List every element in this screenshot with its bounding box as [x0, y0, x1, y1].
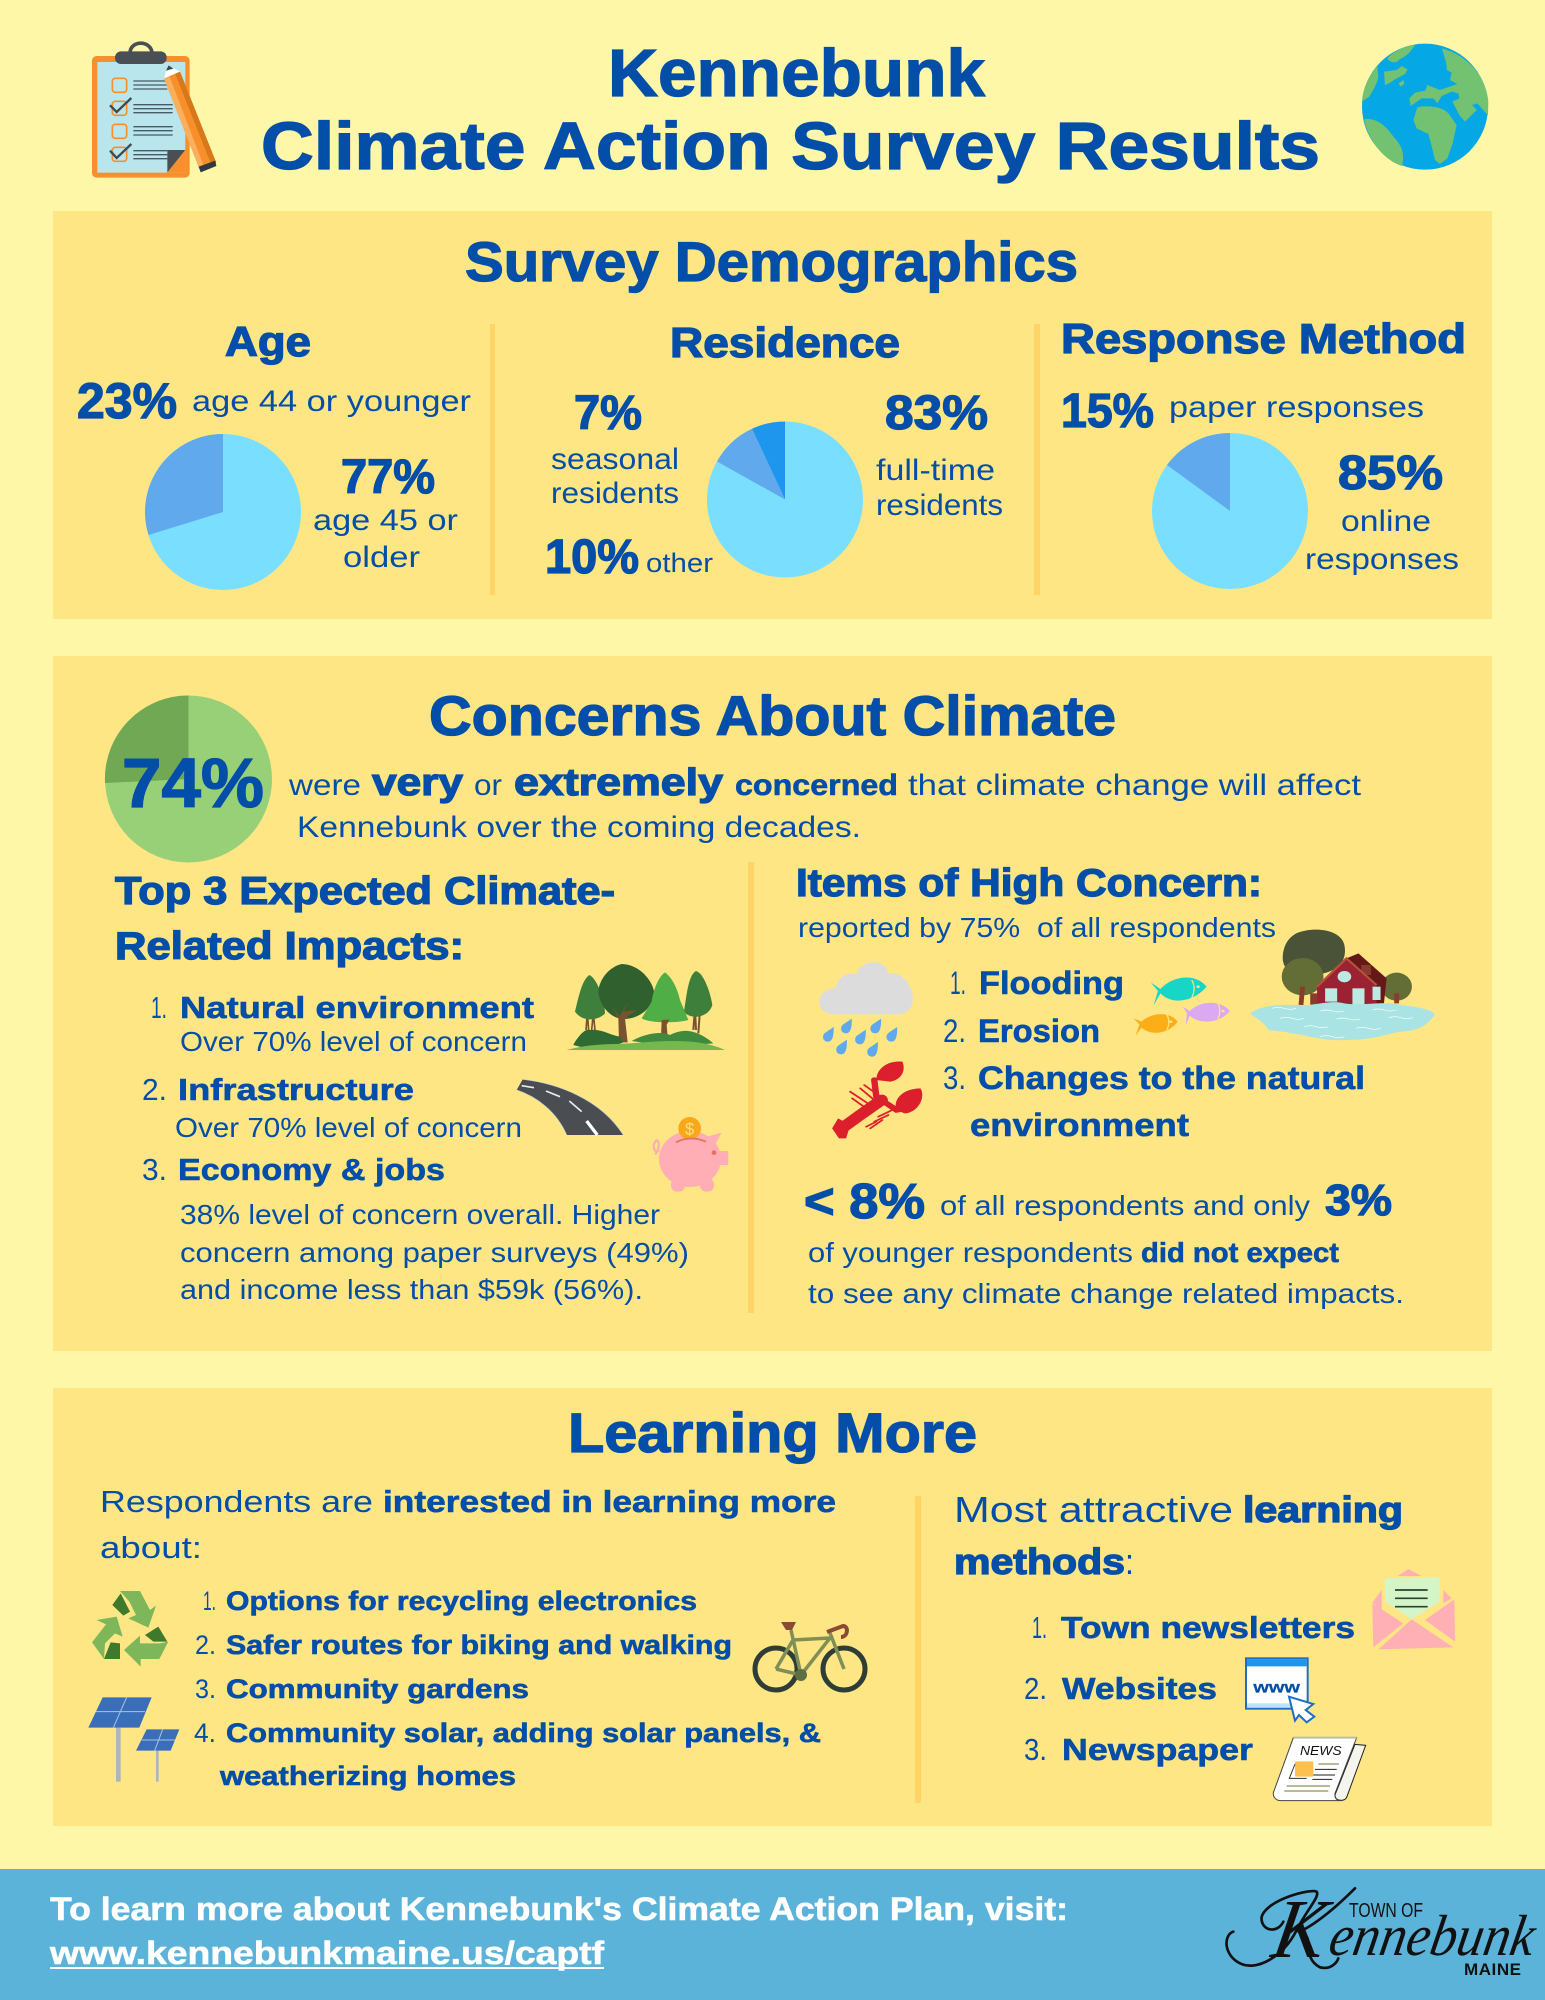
title: Climate Action Survey Results [261, 109, 1320, 184]
icon: flooded house [1250, 930, 1435, 1040]
footer banner [0, 1869, 1545, 2000]
list: topics: 3. [195, 1674, 216, 1704]
list: methods: 1. [1032, 1610, 1047, 1645]
intro text: Kennebunk over the coming decades. [297, 811, 861, 844]
stat: 83 percent full-time: full-time [876, 454, 995, 487]
item: natural environment: 1. [151, 990, 167, 1025]
stat: 77 percent older: age 45 or [313, 504, 458, 537]
stat: 7 percent seasonal: 7% [574, 387, 642, 440]
stat: 23 percent younger [77, 373, 471, 429]
panel: concerns about climate [53, 656, 1492, 1351]
list: methods [1024, 1610, 1355, 1767]
stat: 85 percent online: online [1341, 505, 1431, 538]
intro text: very [372, 762, 463, 804]
list: methods: 2. [1024, 1671, 1047, 1706]
stat: 10 percent other [545, 531, 713, 584]
list: methods: Town newsletters [1061, 1610, 1355, 1645]
logo: town of Kennebunk [1227, 1882, 1545, 1979]
subheading: reported by 75 percent: reported by 75% of all respondents [798, 912, 1276, 943]
item: infrastructure [142, 1072, 522, 1143]
stat: 85 percent online: 85% [1338, 447, 1443, 500]
age column [77, 318, 471, 590]
intro: most attractive learning methods [954, 1489, 1403, 1582]
stat: 7 percent seasonal: seasonal [551, 443, 679, 476]
learning methods [954, 1489, 1455, 1801]
intro: most attractive learning methods: Most attractive [954, 1489, 1233, 1530]
pie chart: 74 percent: 74% [122, 744, 264, 822]
callout: did not expect: to see any climate change related impacts. [808, 1278, 1404, 1309]
intro: interested in learning more: interested in learning more [383, 1484, 836, 1519]
logo: town of Kennebunk: MAINE [1464, 1960, 1521, 1979]
item: economy and jobs [142, 1152, 689, 1305]
logo: town of Kennebunk: K [1265, 1882, 1338, 1976]
icon: bicycle [755, 1622, 865, 1690]
icon: lobster [832, 1061, 922, 1138]
stat: 85 percent online [1305, 447, 1459, 576]
footer text and link [49, 1891, 1068, 1971]
icon: piggy bank [654, 1117, 728, 1192]
list: methods: Websites [1062, 1671, 1217, 1706]
callout: did not expect: 3% [1325, 1176, 1392, 1225]
pie chart: response method [1152, 433, 1308, 589]
top 3 impacts [115, 870, 728, 1305]
stat: 23 percent younger: age 44 or younger [192, 385, 471, 418]
item: infrastructure: Infrastructure [178, 1072, 414, 1107]
intro: interested in learning more: about: [100, 1530, 202, 1565]
pie chart: residence [707, 422, 863, 578]
heading: items of high concern: Items of High Concern: [796, 862, 1262, 905]
item: economy and jobs: Economy & jobs [178, 1152, 445, 1187]
intro: interested in learning more [100, 1484, 836, 1565]
pie chart: 74 percent [105, 696, 272, 862]
heading: top 3 impacts: Top 3 Expected Climate- [115, 870, 615, 913]
list: topics: Safer routes for biking and walking [226, 1630, 732, 1660]
intro text: were [288, 769, 361, 802]
list: topics: Options for recycling electronics [226, 1586, 697, 1616]
panel: learning more [53, 1388, 1492, 1826]
callout: did not expect: did not expect [1141, 1237, 1339, 1268]
item: infrastructure: Over 70% level of concern [175, 1112, 522, 1143]
stat: 77 percent older: older [343, 541, 420, 574]
callout: did not expect: of younger respondents [808, 1237, 1133, 1268]
icon: road [517, 1079, 623, 1135]
intro text: that climate change will affect [908, 769, 1362, 802]
icon: trees [567, 964, 725, 1050]
icon: envelope [1372, 1569, 1455, 1649]
stat: 15 percent paper [1061, 385, 1424, 438]
stat: 15 percent paper: 15% [1061, 385, 1154, 438]
stat: 77 percent older [313, 451, 458, 574]
list: flooding, erosion, changes: 1. [950, 965, 966, 1001]
icon: solar panels [88, 1697, 179, 1782]
item: economy and jobs: concern among paper surveys (49%) [180, 1237, 689, 1268]
list: flooding, erosion, changes: Flooding [979, 965, 1124, 1001]
title: Kennebunk [608, 36, 986, 111]
callout: did not expect: < 8% [804, 1175, 925, 1229]
item: economy and jobs: and income less than $59k (56%). [180, 1274, 643, 1305]
icon: clipboard checklist with pencil [92, 43, 216, 178]
list: methods: Newspaper [1062, 1732, 1253, 1767]
heading: concerns about climate: Concerns About Climate [429, 684, 1116, 747]
icon: earth globe [1362, 44, 1488, 170]
list: flooding, erosion, changes: Erosion [978, 1013, 1100, 1049]
icon: website window [1246, 1658, 1314, 1722]
icon: website window: www [1252, 1679, 1300, 1696]
stat: 85 percent online: responses [1305, 543, 1459, 576]
stat: 83 percent full-time [876, 387, 1003, 522]
intro text: or [474, 769, 502, 802]
stat: 10 percent other: other [646, 548, 713, 578]
intro: interested in learning more: Respondents are [100, 1484, 373, 1519]
title [261, 36, 1320, 184]
list: flooding, erosion, changes: 2. [943, 1013, 966, 1049]
heading: learning more: Learning More [568, 1401, 977, 1464]
intro: most attractive learning methods: methods [954, 1541, 1125, 1582]
item: natural environment: Natural environment [180, 990, 534, 1025]
stat: 77 percent older: 77% [341, 451, 435, 504]
intro: most attractive learning methods: learning [1243, 1489, 1403, 1530]
icon: newspaper: NEWS [1300, 1743, 1342, 1758]
stat: 23 percent younger: 23% [77, 373, 177, 429]
list: flooding, erosion, changes: environment [970, 1107, 1189, 1143]
icon: piggy bank: $ [685, 1119, 694, 1138]
intro: most attractive learning methods: : [1125, 1541, 1134, 1582]
list: flooding, erosion, changes: Changes to the natural [978, 1060, 1365, 1096]
callout: did not expect: of all respondents and only [940, 1190, 1310, 1221]
list: topics: Community solar, adding solar panels, & [226, 1718, 821, 1748]
footer text and link: To learn more about Kennebunk's Climate Action Plan, visit: [50, 1891, 1068, 1927]
logo: town of Kennebunk: TOWN OF [1349, 1900, 1423, 1922]
heading: survey demographics: Survey Demographics [465, 230, 1078, 293]
stat: 15 percent paper: paper responses [1169, 391, 1424, 424]
footer text and link: www.kennebunkmaine.us/captf [49, 1935, 604, 1971]
heading: age: Age [225, 318, 311, 365]
heading: top 3 impacts: Related Impacts: [115, 925, 464, 968]
list: topics: 4. [194, 1718, 216, 1748]
stat: 10 percent other: 10% [545, 531, 639, 584]
heading: residence: Residence [670, 319, 900, 366]
intro text: concerned [735, 769, 898, 802]
icon: rain cloud [819, 962, 913, 1057]
item: infrastructure: 2. [142, 1072, 167, 1107]
intro text: extremely [514, 762, 723, 804]
list: topics [194, 1586, 821, 1791]
item: economy and jobs: 38% level of concern overall. Higher [180, 1199, 660, 1230]
callout: did not expect [804, 1175, 1404, 1309]
list: topics: 1. [203, 1586, 216, 1616]
icon: newspaper [1273, 1738, 1366, 1801]
logo: town of Kennebunk: ennebunk [1325, 1904, 1541, 1968]
list: topics: weatherizing homes [219, 1761, 516, 1791]
stat: 7 percent seasonal [551, 387, 679, 510]
item: economy and jobs: 3. [142, 1152, 167, 1187]
intro text [288, 762, 1362, 844]
residence column [545, 319, 1003, 584]
panel: survey demographics [53, 211, 1492, 619]
icon: recycling symbol [92, 1591, 168, 1667]
list: flooding, erosion, changes: 3. [943, 1060, 966, 1096]
list: flooding, erosion, changes [943, 965, 1365, 1143]
list: methods: 3. [1024, 1732, 1047, 1767]
list: topics: 2. [195, 1630, 216, 1660]
items of high concern [796, 862, 1435, 1309]
pie chart: age [145, 434, 301, 590]
stat: 7 percent seasonal: residents [551, 477, 679, 510]
heading: top 3 impacts [115, 870, 615, 968]
item: natural environment: Over 70% level of concern [180, 1026, 527, 1057]
heading: response method: Response Method [1061, 315, 1466, 362]
item: natural environment [151, 990, 534, 1057]
list: topics: Community gardens [226, 1674, 529, 1704]
response method column [1061, 315, 1466, 589]
stat: 83 percent full-time: residents [876, 489, 1003, 522]
stat: 83 percent full-time: 83% [885, 387, 988, 440]
icon: fish [1133, 978, 1230, 1036]
